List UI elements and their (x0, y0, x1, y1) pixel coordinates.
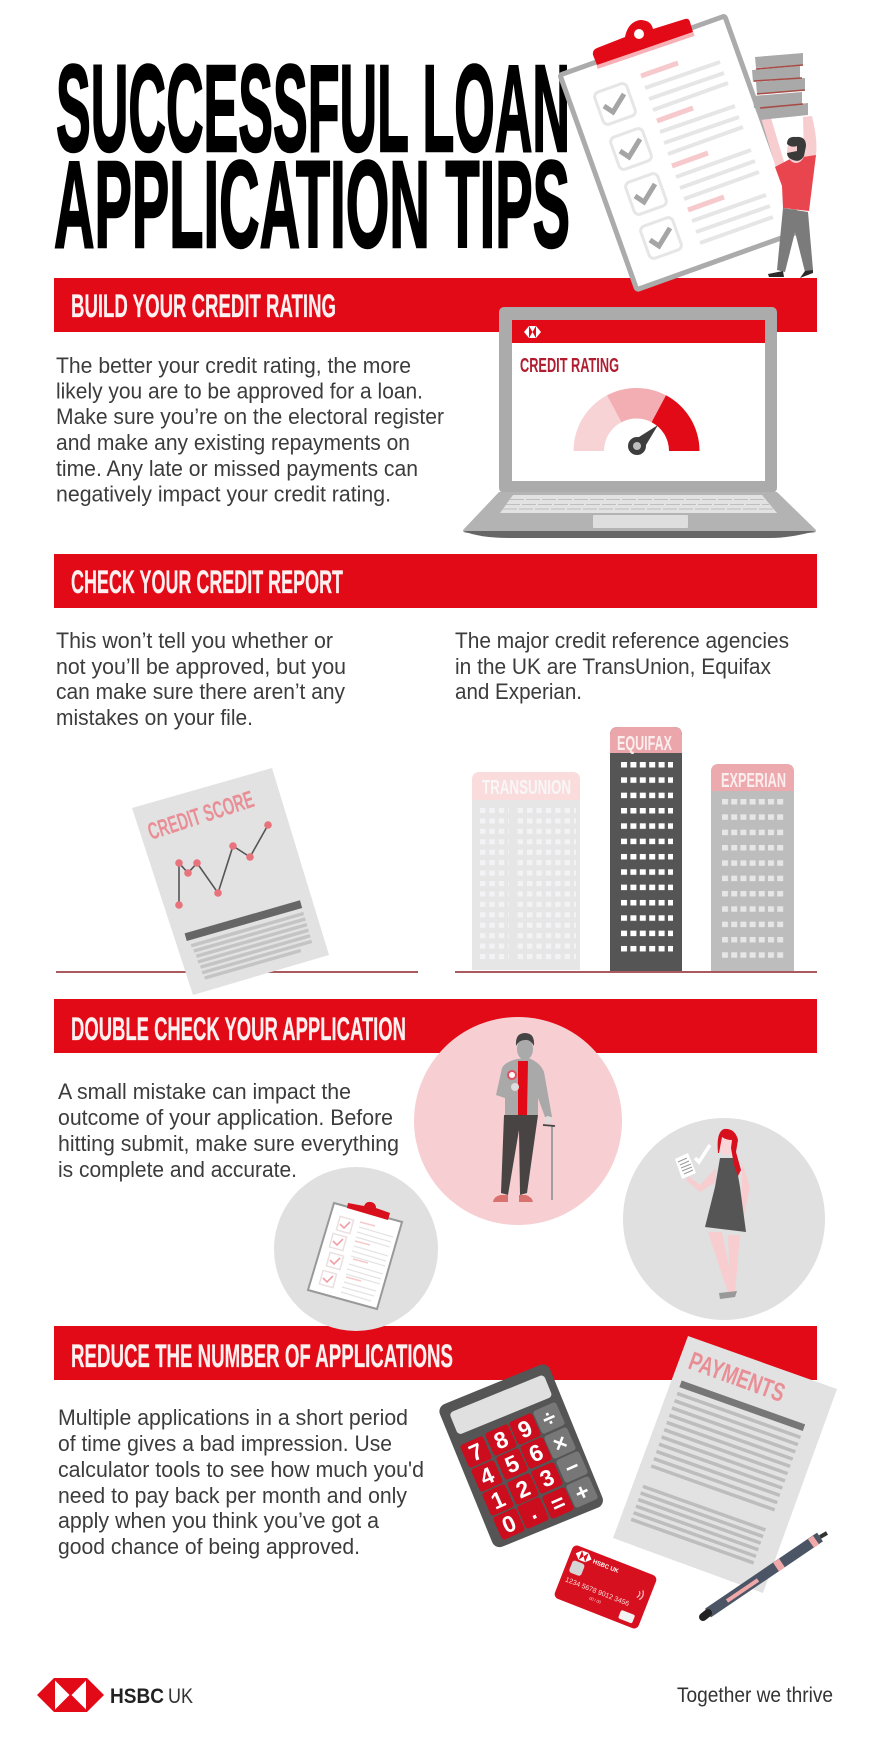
text block: check report left: This won’t tell you whether or (56, 628, 333, 653)
icon: calculator: 8 (490, 1425, 512, 1454)
panel: double check banner (54, 999, 817, 1053)
icon: bank card: 1234 5678 9012 3456 (564, 1577, 630, 1608)
text block: reduce applications: Multiple applications in a short period (58, 1405, 408, 1430)
title (54, 41, 570, 274)
text block: reduce applications: of time gives a bad impression. Use (58, 1431, 392, 1456)
text block: credit rating: likely you are to be approved for a loan. (56, 378, 423, 404)
text block: reduce applications: apply when you think you’ve got a (58, 1508, 380, 1533)
icon: calculator: × (549, 1428, 571, 1458)
panel: grey circle with small clipboard (274, 1167, 438, 1331)
icon: calculator: 9 (514, 1415, 536, 1443)
icon: calculator: − (561, 1452, 583, 1482)
panel: reduce applications banner (54, 1326, 817, 1380)
building: Equifax: EQUIFAX (617, 733, 672, 755)
panel: reduce applications banner: REDUCE THE NUMBER OF APPLICATIONS (71, 1338, 453, 1374)
icon: bank card: 00 / 00 (589, 1596, 602, 1605)
building: TransUnion: TRANSUNION (482, 777, 571, 799)
text block: check report left (56, 628, 346, 730)
text block: check report left: not you’ll be approved, but you (56, 654, 346, 679)
text block: credit rating: negatively impact your credit rating. (56, 482, 391, 506)
icon: large clipboard checklist (560, 16, 802, 290)
text block: check report left: can make sure there aren’t any (56, 679, 345, 704)
icon: bank card: HSBC UK (592, 1559, 620, 1575)
icon: calculator (437, 1362, 605, 1550)
icon: calculator: 5 (501, 1449, 523, 1478)
panel: double check banner: DOUBLE CHECK YOUR APPLICATION (71, 1011, 406, 1047)
icon: calculator: . (524, 1498, 540, 1524)
building: Experian (711, 764, 794, 972)
icon: calculator: = (547, 1488, 569, 1518)
building: Experian: EXPERIAN (721, 770, 786, 792)
building: Equifax (610, 727, 682, 972)
icon: calculator: + (571, 1477, 593, 1507)
text block: credit rating: The better your credit rating, the more (56, 353, 411, 378)
text block: credit rating: Make sure you’re on the electoral register (56, 404, 444, 429)
icon: man holding books (752, 53, 816, 278)
icon: calculator: 0 (498, 1510, 520, 1538)
text block: credit rating: and make any existing repayments on (56, 430, 410, 455)
text block: double check: A small mistake can impact the (58, 1079, 351, 1104)
text block: credit rating (56, 353, 444, 506)
tagline: Together we thrive (677, 1684, 833, 1707)
icon: calculator: 1 (487, 1485, 509, 1514)
panel: build your credit rating banner (54, 278, 817, 332)
icon: payments document: PAYMENTS (685, 1345, 789, 1408)
text block: double check (58, 1079, 399, 1182)
icon: calculator: 6 (525, 1439, 547, 1467)
text block: double check: outcome of your application. Before (58, 1105, 393, 1130)
ground line left (56, 971, 418, 973)
text block: reduce applications: calculator tools to see how much you'd (58, 1457, 424, 1482)
text block: check report right: The major credit reference agencies (455, 628, 789, 653)
panel: build your credit rating banner: BUILD YOUR CREDIT RATING (71, 288, 336, 324)
text block: reduce applications: good chance of being approved. (58, 1534, 360, 1559)
panel: grey circle with woman (623, 1118, 825, 1320)
logo: HSBC UK (37, 1678, 193, 1712)
text block: reduce applications: need to pay back per month and only (58, 1483, 407, 1508)
panel: check your credit report banner: CHECK YOUR CREDIT REPORT (71, 564, 343, 600)
text block: check report left: mistakes on your file. (56, 705, 253, 730)
icon: calculator: 7 (465, 1438, 487, 1466)
icon: credit score document: CREDIT SCORE (145, 786, 257, 846)
text block: check report right: and Experian. (455, 679, 582, 704)
panel: check your credit report banner (54, 554, 817, 608)
icon: pen (703, 1533, 827, 1617)
text block: check report right (455, 628, 789, 704)
icon: credit score document (132, 768, 329, 995)
icon: calculator: 2 (512, 1475, 534, 1503)
logo: HSBC UK: UK (168, 1685, 193, 1708)
icon: calculator: 3 (536, 1464, 558, 1492)
text block: double check: hitting submit, make sure everything (58, 1131, 399, 1156)
text block: reduce applications (58, 1405, 424, 1559)
logo: HSBC UK: HSBC (110, 1685, 164, 1708)
text block: credit rating: time. Any late or missed payments can (56, 456, 418, 481)
icon: payments document (613, 1336, 837, 1593)
icon: bank card (553, 1544, 658, 1630)
icon: laptop with credit rating gauge: CREDIT RATING (520, 355, 619, 377)
ground line right (455, 971, 817, 973)
icon: calculator: ÷ (538, 1403, 560, 1432)
building: TransUnion (472, 772, 580, 970)
text block: double check: is complete and accurate. (58, 1157, 297, 1182)
panel: pink circle with man (414, 1017, 622, 1225)
icon: calculator: 4 (476, 1461, 498, 1490)
icon: laptop with credit rating gauge (463, 307, 816, 538)
text block: check report right: in the UK are TransUnion, Equifax (455, 654, 771, 679)
